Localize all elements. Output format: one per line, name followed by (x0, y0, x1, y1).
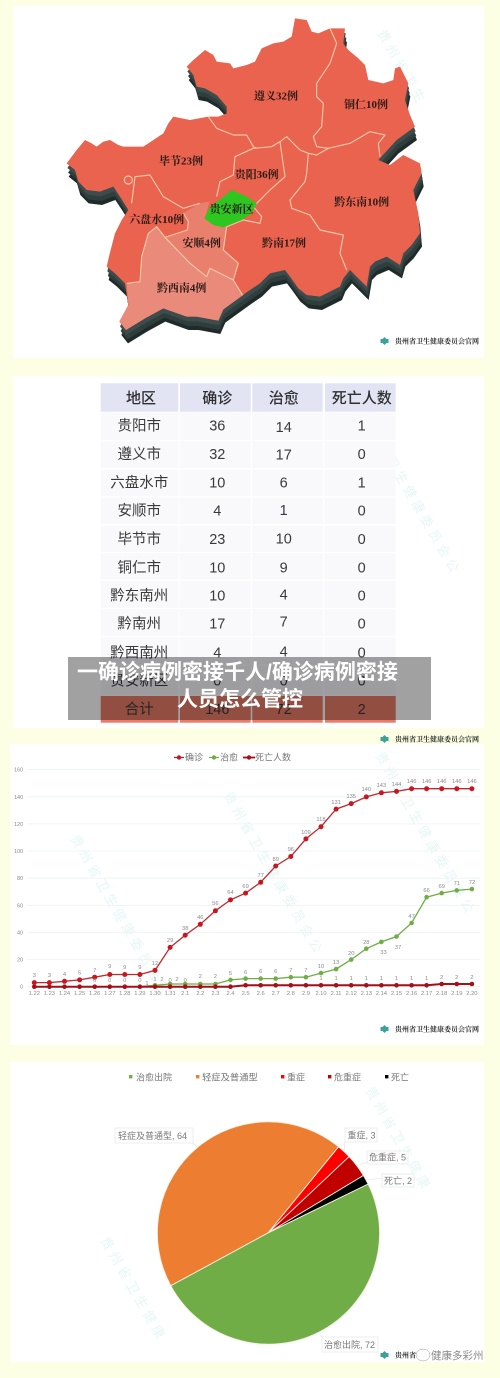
x axis labels: 1.23 (44, 991, 55, 997)
cases table: 治愈 (269, 389, 299, 407)
pie legend: 轻症及普通型 (202, 1072, 258, 1082)
data labels: confirmed: 109 (301, 830, 311, 836)
panel: pie chart background (10, 1062, 484, 1362)
cases table: 17 (209, 617, 225, 633)
chart legend: 确诊 (185, 752, 203, 763)
x axis labels (29, 991, 478, 997)
data labels: deaths (145, 975, 474, 987)
x axis labels: 1.31 (164, 991, 176, 997)
data labels: cured (93, 880, 475, 984)
data labels: cured: 72 (469, 880, 475, 886)
x axis labels: 2.7 (272, 991, 280, 997)
watermarks: 贵州省卫生健康委员会公 (372, 749, 479, 918)
series: cured (34, 887, 474, 988)
series: confirmed (32, 786, 474, 985)
y axis labels: 20 (17, 958, 23, 964)
series: deaths (32, 982, 474, 989)
data labels: deaths: 2 (175, 977, 179, 983)
cases table: 贵阳市 (118, 418, 161, 435)
data labels: confirmed: 4 (63, 972, 67, 978)
x axis labels: 2.16 (406, 991, 417, 997)
y axis labels (14, 768, 23, 991)
x axis labels: 2.5 (242, 991, 250, 997)
cases table: 0 (358, 532, 366, 548)
x axis labels: 2.9 (302, 991, 310, 997)
slice: cured 72 (171, 1184, 380, 1344)
cases table: 0 (280, 674, 288, 690)
data labels: confirmed: 12 (152, 961, 158, 967)
data labels: cured: 13 (333, 960, 339, 966)
watermarks: 贵州省卫生健康 (97, 1234, 170, 1345)
data labels: deaths: 1 (334, 976, 338, 982)
data labels: confirmed: 56 (212, 901, 219, 907)
cases table: 铜仁市 (118, 559, 161, 576)
x axis labels: 2.17 (421, 991, 432, 997)
watermarks: 贵州省卫生健康委员会公 (224, 479, 331, 648)
pie callouts: 死亡, 2 (384, 1175, 412, 1186)
cases table: 17 (276, 448, 292, 464)
pie callouts: 轻症及普通型, 64 (118, 1130, 187, 1141)
y axis labels: 160 (14, 768, 23, 774)
chart legend: 治愈 (220, 752, 238, 763)
y axis labels: 40 (17, 930, 23, 936)
pie source logo with wechat mark: 贵州省 (395, 1350, 417, 1360)
x axis labels: 2.12 (346, 991, 357, 997)
data labels: cured: 1 (153, 977, 157, 983)
cases table: 贵安新区 (110, 673, 168, 690)
data labels: confirmed (33, 779, 477, 979)
x axis labels: 2.4 (226, 991, 235, 997)
x axis labels: 2.8 (287, 991, 295, 997)
panel: map background (13, 6, 484, 358)
chart legend (174, 752, 291, 763)
cases table: 72 (276, 702, 292, 718)
data labels: cured: 20 (348, 951, 354, 957)
data labels: cured: 7 (289, 968, 292, 974)
data labels: cured: 6 (259, 969, 262, 975)
data labels: deaths: 1 (410, 976, 413, 982)
data labels: confirmed: 9 (138, 965, 142, 971)
cases table: 0 (358, 589, 366, 605)
cases table: 确诊 (202, 390, 232, 407)
data labels: cured: 33 (380, 950, 387, 956)
cases table: 10 (209, 589, 225, 605)
region labels: 安顺4例 (182, 235, 221, 249)
cases table: 2 (358, 702, 366, 718)
watermarks: 贵州省卫生健康委员会公 (67, 832, 174, 1001)
region labels: 黔南17例 (262, 235, 306, 249)
data labels: confirmed: 146 (422, 779, 431, 785)
cases table: 1 (358, 419, 366, 435)
x axis labels: 2.18 (436, 991, 447, 997)
watermarks: 贵州省卫生健康 (362, 1084, 435, 1195)
data labels: confirmed: 96 (288, 847, 294, 853)
y axis labels: 140 (14, 795, 23, 801)
panel: line chart background (10, 744, 484, 1045)
data labels: confirmed: 9 (108, 964, 111, 970)
cases table: 黔西南州 (110, 644, 168, 661)
x axis labels: 2.2 (196, 991, 204, 997)
x axis labels: 2.20 (466, 991, 478, 997)
cases table: 0 (358, 447, 366, 463)
x axis labels: 1.26 (89, 991, 100, 997)
pie legend: 治愈出院 (136, 1072, 172, 1082)
data labels: cured: 7 (304, 968, 308, 974)
cases table: 4 (213, 504, 221, 520)
cases table: 安顺市 (118, 503, 161, 520)
title line 2: 人员怎么管控 (177, 688, 303, 711)
x axis labels: 2.15 (391, 991, 402, 997)
region labels: 毕节23例 (159, 153, 203, 167)
pie callouts: 危重症, 5 (369, 1152, 406, 1162)
panel: table background (13, 376, 484, 728)
cases table: 0 (213, 674, 221, 690)
line chart: cumulative cases (14, 752, 480, 1034)
region labels: 铜仁10例 (344, 97, 388, 111)
table source logo: 贵州省卫生健康委员会官网 (395, 734, 479, 744)
x axis labels: 1.28 (119, 991, 130, 997)
cases table: 死亡人数 (332, 390, 392, 407)
watermarks: 贵州省卫生健康委员会公 (220, 789, 327, 958)
data labels: confirmed: 29 (167, 938, 173, 944)
title line 1: 一确诊病例密接千人/确诊病例密接 (77, 661, 398, 684)
cases table: 地区 (126, 390, 156, 407)
cases table: 0 (358, 674, 366, 690)
cases table: 遵义市 (118, 446, 161, 463)
data labels: deaths: 2 (160, 977, 164, 983)
data labels: deaths: 2 (470, 975, 474, 981)
data labels: cured: 69 (438, 884, 445, 890)
pie callouts: 重症, 3 (348, 1130, 376, 1140)
data labels: cured: 0 (184, 978, 187, 984)
data labels: cured: 2 (199, 974, 202, 980)
cases table: 毕节市 (118, 531, 161, 548)
cases table: 1 (358, 476, 366, 492)
cases table: 7 (280, 614, 288, 630)
data labels: confirmed: 7 (93, 968, 96, 974)
pie chart: case outcomes (115, 1072, 484, 1362)
region labels: 遵义32例 (254, 89, 298, 103)
chart legend: 死亡人数 (255, 752, 291, 763)
data labels: confirmed: 5 (78, 970, 81, 976)
x axis labels: 1.29 (134, 991, 146, 997)
x axis labels: 1.24 (59, 991, 71, 997)
cases table: 36 (209, 419, 225, 435)
region labels: 六盘水10例 (129, 212, 184, 226)
title overlay bar (68, 657, 431, 720)
x axis labels: 1.30 (149, 991, 161, 997)
data labels: deaths: 1 (395, 976, 398, 982)
cases table: 0 (358, 645, 366, 661)
region labels: 贵安新区 (210, 201, 254, 215)
region labels: 黔东南10例 (334, 195, 389, 209)
data labels: confirmed: 146 (407, 779, 416, 785)
cases table: 黔东南州 (110, 588, 168, 605)
slice: severe 3 (268, 1147, 349, 1233)
data labels: confirmed: 38 (182, 926, 188, 932)
cases table: 10 (276, 532, 292, 548)
slice: critical 5 (268, 1157, 363, 1233)
cases table: 6 (280, 476, 288, 492)
region: Gui'an New Area (204, 190, 257, 227)
data labels: cured: 10 (318, 964, 324, 970)
data labels: confirmed: 3 (33, 973, 36, 979)
region labels: 贵阳36例 (235, 167, 279, 181)
watermarks (67, 27, 479, 1345)
data labels: deaths: 1 (380, 976, 383, 982)
data labels: cured: 0 (138, 978, 142, 984)
chart source logo: 贵州省卫生健康委员会官网 (395, 1024, 479, 1034)
cases table: 4 (213, 645, 221, 661)
data labels: deaths: 1 (319, 976, 323, 982)
data labels: confirmed: 9 (123, 965, 126, 971)
data labels: deaths: 2 (440, 975, 443, 981)
data labels: deaths: 1 (425, 976, 428, 982)
data labels: confirmed: 144 (392, 782, 402, 788)
cases table: 14 (276, 420, 292, 436)
y axis labels: 0 (20, 985, 23, 991)
x axis labels: 2.1 (181, 991, 189, 997)
cases table: 10 (209, 560, 225, 576)
watermarks: 贵州省卫生健康委员会公 (357, 409, 464, 578)
data labels: confirmed: 64 (227, 890, 234, 896)
pie legend: 重症 (287, 1072, 305, 1082)
cases table: 0 (358, 617, 366, 633)
slice: death 2 (268, 1176, 368, 1233)
data labels: confirmed: 143 (377, 783, 386, 789)
data labels: cured: 66 (423, 888, 430, 894)
data labels: confirmed: 89 (272, 857, 279, 863)
cases table: 六盘水市 (110, 473, 168, 491)
region labels (129, 89, 389, 294)
data labels: confirmed: 146 (437, 779, 447, 785)
data labels: confirmed: 135 (346, 794, 356, 800)
x axis labels: 2.19 (451, 991, 462, 997)
pie legend: 死亡 (391, 1072, 409, 1082)
x axis labels: 1.27 (104, 991, 115, 997)
cases table: 23 (209, 532, 225, 548)
pie legend (129, 1072, 409, 1082)
cases table: 32 (209, 447, 225, 463)
cases table: 1 (280, 503, 288, 519)
data labels: cured: 47 (408, 914, 415, 920)
data labels: cured: 6 (244, 970, 247, 976)
pie source logo with wechat mark: 健康多彩州 (431, 1349, 484, 1362)
data labels: cured: 2 (214, 974, 217, 980)
x axis labels: 2.10 (315, 991, 327, 997)
data labels: confirmed: 118 (316, 817, 326, 823)
data labels: cured: 6 (274, 969, 277, 975)
data labels: cured: 71 (454, 881, 460, 887)
y axis labels: 80 (17, 876, 23, 882)
map of Guizhou (67, 18, 424, 343)
cases table: 4 (280, 588, 288, 604)
cases table: 0 (358, 504, 366, 520)
data labels: cured: 0 (93, 978, 96, 984)
cases table: 146 (205, 702, 229, 718)
x axis labels: 2.11 (331, 991, 342, 997)
x axis labels: 1.22 (29, 991, 40, 997)
pie callouts: 治愈出院, 72 (324, 1339, 375, 1350)
data labels: cured: 0 (108, 978, 111, 984)
data labels: confirmed: 77 (257, 873, 264, 879)
cases table: 10 (209, 475, 225, 491)
slice: mild and common 64 (157, 1122, 339, 1286)
cases table: 0 (358, 560, 366, 576)
y axis labels: 120 (14, 822, 23, 828)
watermarks: 贵州省卫生 (374, 27, 430, 108)
x axis labels: 2.13 (361, 991, 372, 997)
x axis labels: 2.14 (376, 991, 388, 997)
cases table: 合计 (125, 701, 154, 718)
data labels: cured: 28 (363, 940, 370, 946)
data labels: deaths: 1 (145, 981, 149, 987)
data labels: confirmed: 46 (197, 915, 204, 921)
data labels: confirmed: 146 (467, 779, 477, 785)
pie callouts (115, 1128, 414, 1352)
cases table: 4 (280, 644, 288, 660)
data labels: confirmed: 69 (242, 884, 249, 890)
pie source logo with wechat mark (380, 1349, 484, 1362)
cases table (100, 383, 396, 723)
cases table: 黔南州 (118, 616, 161, 633)
data labels: cured: 0 (168, 978, 172, 984)
data labels: confirmed: 3 (48, 973, 51, 979)
data labels: confirmed: 146 (452, 779, 462, 785)
data labels: deaths: 1 (350, 976, 353, 982)
data labels: cured: 0 (123, 978, 126, 984)
data labels: deaths: 2 (455, 975, 458, 981)
x axis labels: 2.6 (257, 991, 265, 997)
x axis labels: 1.25 (74, 991, 85, 997)
x axis labels: 2.3 (211, 991, 219, 997)
cases table: 9 (280, 560, 288, 576)
data labels: confirmed: 131 (331, 800, 341, 806)
map source logo: 贵州省卫生健康委员会官网 (395, 336, 479, 346)
y axis labels: 60 (17, 903, 23, 909)
data labels: cured: 5 (229, 971, 232, 977)
data labels: deaths: 1 (365, 976, 368, 982)
data labels: confirmed: 140 (361, 787, 371, 793)
y axis labels: 100 (14, 849, 23, 855)
pie legend: 危重症 (334, 1072, 361, 1082)
region labels: 黔西南4例 (157, 280, 206, 294)
data labels: cured: 37 (395, 945, 401, 951)
